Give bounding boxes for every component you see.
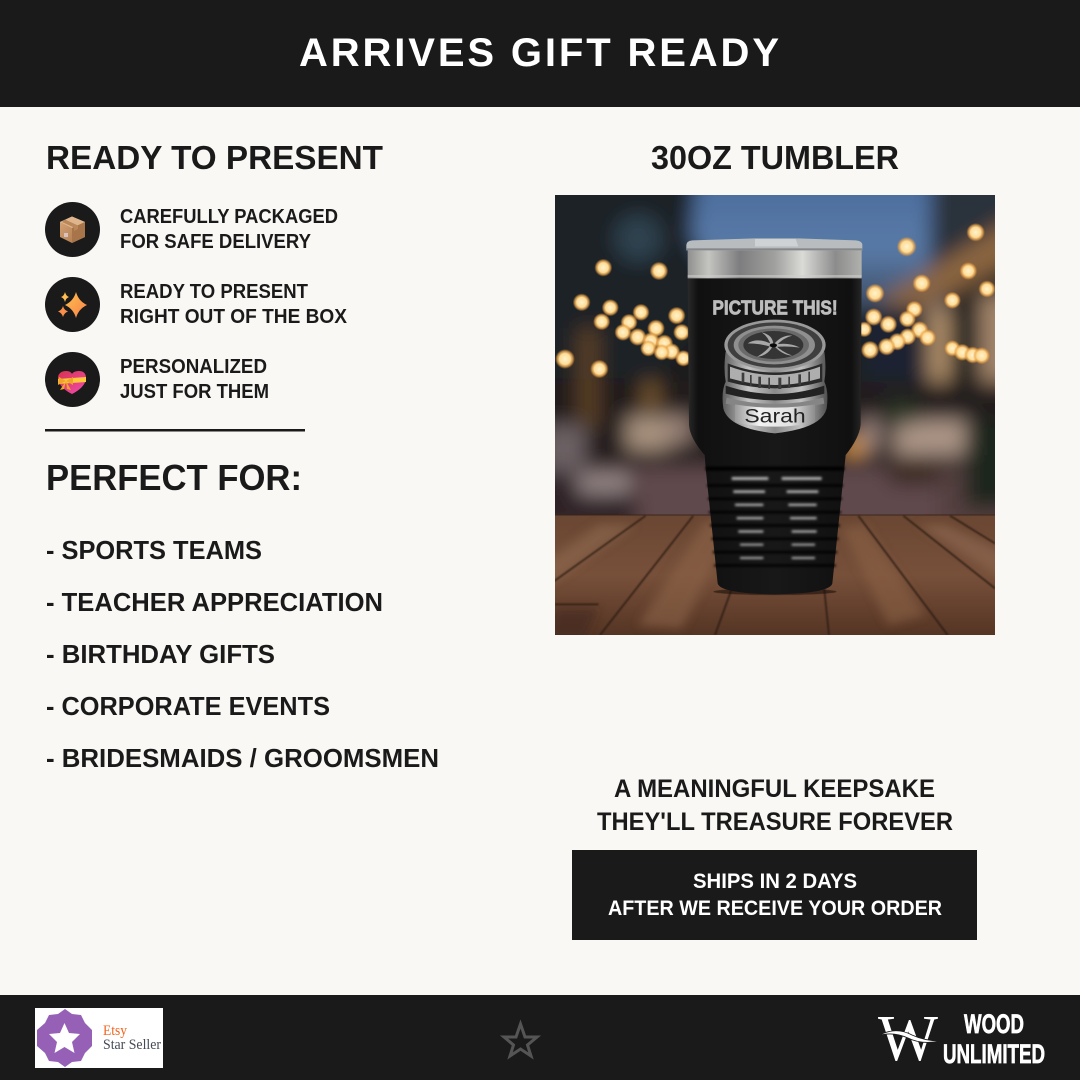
blurred patio background xyxy=(555,195,995,515)
heading: 30oz tumbler: 30OZ TUMBLER xyxy=(651,139,899,176)
benefit: carefully packaged xyxy=(45,202,338,257)
tumbler ribs xyxy=(706,467,844,567)
benefit: ready right out of the box xyxy=(45,277,348,332)
logo: wood unlimited: WOOD xyxy=(964,1009,1024,1039)
icon: sparkles xyxy=(58,292,87,318)
lid xyxy=(686,238,862,250)
benefit: carefully packaged: FOR SAFE DELIVERY xyxy=(120,231,312,253)
text: personalized: PERSONALIZED xyxy=(120,356,267,378)
shipping callout: SHIPS IN 2 DAYS xyxy=(693,870,857,893)
list: occasions: - TEACHER APPRECIATION xyxy=(46,587,383,617)
badge: etsy star seller xyxy=(35,1008,163,1068)
list: occasions: - BIRTHDAY GIFTS xyxy=(46,639,275,669)
shipping callout xyxy=(572,850,977,940)
panel: perfect for xyxy=(46,457,439,773)
text: carefully packaged: CAREFULLY PACKAGED xyxy=(120,206,338,228)
title: ARRIVES GIFT READY xyxy=(299,31,779,75)
list: occasions: - SPORTS TEAMS xyxy=(46,535,262,565)
footer band xyxy=(0,995,1080,1080)
icon: heart with ribbon xyxy=(58,371,86,394)
steel rim xyxy=(688,250,862,278)
benefit: ready right out of the box: RIGHT OUT OF THE BOX xyxy=(120,306,348,328)
badge: etsy star seller: Star Seller xyxy=(103,1037,161,1053)
icon: star outline xyxy=(504,1024,537,1056)
wooden table xyxy=(542,514,1002,638)
header band xyxy=(0,0,1080,107)
tumbler xyxy=(686,238,862,595)
list: occasions: - BRIDESMAIDS / GROOMSMEN xyxy=(46,743,439,773)
iris blades xyxy=(748,332,800,357)
list: occasions xyxy=(46,535,439,773)
tumbler body xyxy=(688,277,862,594)
heading: perfect for: PERFECT FOR: xyxy=(46,457,302,498)
benefit: personalized: JUST FOR THEM xyxy=(120,381,269,403)
benefit: personalized xyxy=(45,352,269,407)
name band xyxy=(735,404,815,427)
logo: wood unlimited: W xyxy=(878,1002,939,1075)
list: occasions: - CORPORATE EVENTS xyxy=(46,691,330,721)
shipping callout: AFTER WE RECEIVE YOUR ORDER xyxy=(608,897,942,920)
heading: ready to present: READY TO PRESENT xyxy=(46,139,383,176)
tagline: meaningful keepsake: THEY'LL TREASURE FOREVER xyxy=(597,808,953,836)
tagline: meaningful keepsake: A MEANINGFUL KEEPSAKE xyxy=(614,775,935,803)
string lights bokeh xyxy=(555,223,996,378)
panel: ready to present xyxy=(45,139,383,407)
icon: package box xyxy=(60,216,85,243)
badge: etsy star seller: Etsy xyxy=(103,1023,127,1039)
engraved lens illustration xyxy=(723,320,827,433)
logo: wood unlimited xyxy=(878,1002,1045,1075)
engraved text: picture this: PICTURE THIS! xyxy=(712,296,838,319)
tagline: meaningful keepsake xyxy=(597,775,953,836)
text: ready to present: READY TO PRESENT xyxy=(120,281,308,303)
product photo: engraved tumbler on patio xyxy=(555,195,995,635)
engraved name: Sarah xyxy=(744,407,806,428)
